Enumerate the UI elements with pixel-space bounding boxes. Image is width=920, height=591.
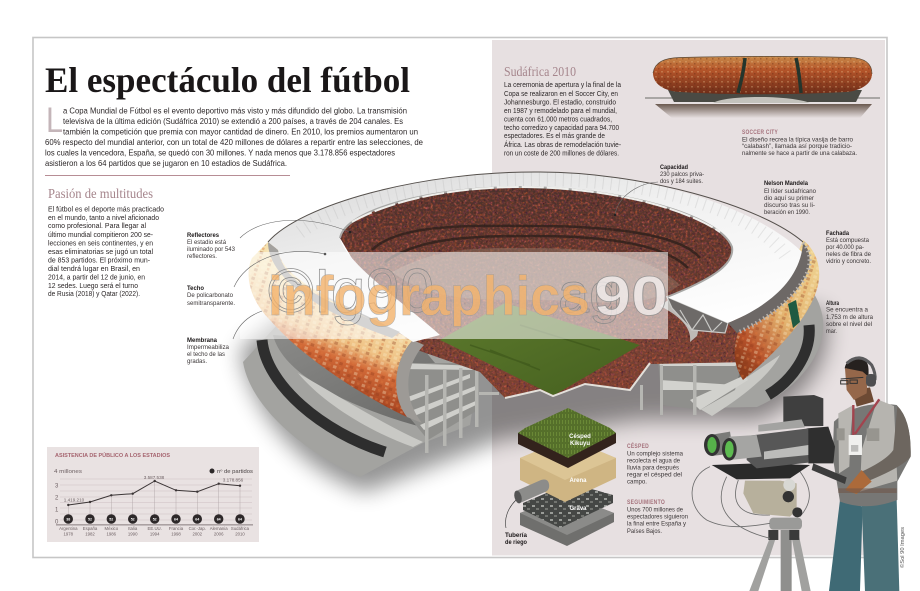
panel: attendance line chart: 64 [174, 517, 178, 521]
text block: Pasión de multitudes: dial tendrá lugar en Brasil, en [48, 266, 140, 273]
callout: Fachada: vidrio y concreto. [826, 259, 871, 265]
intro text block: a Copa Mundial de Fútbol es el evento deportivo más visto y más difundido del globo. La transmisión [63, 106, 407, 116]
panel: attendance line chart: 0 [55, 520, 59, 526]
text block: Pasión de multitudes: lecciones en seis continentes, y en [48, 240, 153, 248]
callout: Reflectores: iluminado por 543 [187, 247, 236, 253]
panel: attendance line chart: 2002 [193, 532, 203, 536]
intro text block: L [46, 101, 63, 140]
callout: Techo [187, 252, 326, 307]
text block: Sudáfrica 2010: techo corredizo y capacidad para 94.700 [504, 125, 619, 132]
callout: Techo: semitransparente. [187, 301, 235, 307]
callout: Nelson Mandela: dio aquí su primer [764, 196, 814, 202]
panel: attendance line chart: Alemania [210, 526, 228, 531]
text block: Pasión de multitudes: Pasión de multitudes [48, 187, 153, 202]
callout: Fachada: Fachada [826, 231, 850, 237]
panel: attendance line chart: 1990 [128, 532, 138, 536]
panel: attendance line chart: 52 [88, 517, 92, 521]
left cut section with columns [397, 363, 499, 453]
panel: attendance line chart: ASISTENCIA DE PÚBLICO A LOS ESTADIOS [55, 452, 170, 459]
seating bowl [340, 188, 744, 398]
text block: Césped: Un complejo sistema [627, 452, 684, 458]
text block: Sudáfrica 2010 [504, 65, 622, 158]
panel: Sudáfrica 2010 background [492, 40, 885, 556]
callout: Capacidad: Capacidad [660, 165, 688, 171]
intro text block [45, 101, 423, 176]
callout: Techo: De policarbonato [187, 293, 234, 299]
panel: attendance line chart: EE.UU. [148, 526, 162, 531]
text block: Sudáfrica 2010: África. Las obras de remodelación tuvie- [504, 140, 622, 149]
text block: Seguimiento [627, 500, 688, 535]
illustration: pitch soil layers: Tubería [505, 533, 528, 539]
text block: Pasión de multitudes: El fútbol es el deporte más practicado [48, 206, 164, 213]
illustration: pitch soil layers: de riego [505, 540, 527, 546]
text block: Césped: lluvia para después [627, 466, 679, 472]
panel: attendance line chart: 1.419.210 [64, 498, 85, 502]
camera handle [812, 463, 847, 484]
intro text block: los cuales la vencedora, España, se quedó con 30 millones. Y nada menos que 3.178.856 espectadores [45, 148, 395, 158]
panel: attendance line chart: 64 [195, 517, 199, 521]
text block: Pasión de multitudes [48, 187, 164, 298]
bowl front rim [505, 363, 650, 398]
panel: attendance line chart: 64 [238, 517, 242, 521]
layer: grass [518, 408, 616, 458]
callout: Reflectores [187, 220, 351, 260]
callout: Altura: Se encuentra a [826, 308, 869, 314]
right facade [735, 240, 819, 380]
text block: Sudáfrica 2010: cuenta con 61.000 metros cuadrados, [504, 116, 612, 124]
callout: Altura: Altura [826, 301, 839, 307]
panel: attendance line chart: 52 [131, 517, 135, 521]
text block: Sudáfrica 2010: espectadores. Es el más grande de [504, 133, 605, 140]
callout: Reflectores: reflectores. [187, 254, 217, 260]
callout: Reflectores: El estadio está [187, 240, 227, 246]
panel: attendance line chart: 1982 [85, 532, 95, 536]
layer: irrigation pipe [513, 480, 549, 504]
panel: attendance line chart: 2006 [214, 532, 224, 536]
panel: attendance line chart: 1978 [64, 532, 74, 536]
text block: Sudáfrica 2010: en 1987 y remodelado para el mundial, [504, 108, 617, 115]
text block: Césped: CÉSPED [627, 442, 649, 450]
photo credit: ©Sol 90 Images [899, 527, 906, 568]
panel: attendance line chart: Argentina [59, 526, 78, 531]
main title: El espectáculo del fútbol [45, 60, 410, 100]
text block: Pasión de multitudes: 12 sedes. Luego será el turno [48, 283, 138, 290]
text block: Pasión de multitudes: esas eliminatorias se jugó un total [48, 249, 153, 256]
panel: attendance line chart: 1994 [150, 532, 160, 536]
text block: Sudáfrica 2010: Sudáfrica 2010 [504, 65, 576, 80]
text block: Seguimiento: la final entre España y [627, 522, 686, 528]
watermark: infographics90: infographics [268, 264, 590, 327]
football pitch [440, 303, 640, 395]
illustration: pitch soil layers: Arena [569, 478, 587, 484]
text block: Seguimiento: espectadores siguieron [627, 514, 688, 520]
text block: Soccer City: nalmente se hace a partir de una calabaza. [742, 151, 857, 157]
cameraman torso [833, 399, 911, 506]
soft shadow under stadium [240, 300, 827, 492]
illustration: pitch soil layers: Kikuyu [570, 441, 590, 447]
panel: attendance line chart: nº de partidos [217, 469, 254, 475]
panel: attendance line chart: 52 [109, 517, 113, 521]
text block: Soccer City [742, 130, 857, 157]
text block: Pasión de multitudes: 2014, a partir del 12 de junio, en [48, 274, 145, 282]
panel: attendance line chart: 2 [55, 496, 59, 502]
cameraman legs [829, 498, 899, 591]
callout: Nelson Mandela: El líder sudafricano [764, 189, 817, 195]
callout: Nelson Mandela: beración en 1990. [764, 210, 810, 216]
callout: Altura [826, 301, 874, 335]
watermark: infographics90: 90 [594, 264, 668, 327]
text block: Césped: regar el césped del [627, 472, 682, 478]
text block: Seguimiento: Unos 700 millones de [627, 508, 684, 514]
panel: attendance line chart: 64 [217, 517, 221, 521]
panel: attendance line chart: 1 [55, 508, 59, 514]
panel: attendance line chart: 3.587.538 [144, 475, 165, 480]
layer: base [520, 495, 614, 546]
panel: attendance line chart: 3 [55, 484, 59, 490]
callout: Membrana: el techo de las [187, 352, 225, 358]
illustration: Soccer City exterior [645, 56, 880, 118]
panel: attendance line chart: México [104, 526, 119, 531]
text block: Pasión de multitudes: en el mundo, tanto a nivel aficionado [48, 215, 159, 222]
panel: attendance line chart: 52 [153, 517, 157, 521]
text block: Soccer City: “calabash”, llamada así porque tradicio- [742, 144, 852, 150]
illustration: pitch soil layers [505, 408, 616, 546]
callout: Capacidad [614, 165, 704, 216]
callout: Membrana: gradas. [187, 359, 207, 365]
callout: Capacidad: dos y 184 suites. [660, 179, 703, 185]
camera pan head [743, 479, 802, 517]
panel: attendance line chart: Cor.-Jap. [189, 526, 206, 531]
illustration: cameraman with TV camera [692, 358, 911, 591]
tripod [749, 518, 811, 591]
panel: attendance line chart: 2010 [235, 532, 245, 536]
callout: Membrana [187, 311, 262, 365]
camera cables [692, 467, 809, 538]
text block: Soccer City: El diseño recrea la típica vasija de barro [742, 138, 854, 144]
text block: Soccer City: SOCCER CITY [742, 130, 778, 136]
text block: Césped [627, 442, 684, 486]
callout: Reflectores: Reflectores [187, 233, 220, 239]
illustration: stadium cutaway [243, 172, 823, 477]
camera body [747, 395, 835, 468]
layer: soil [518, 413, 616, 468]
callout: Nelson Mandela: Nelson Mandela [764, 181, 809, 187]
callout: Fachada: por 40.000 pa- [826, 245, 864, 251]
panel: attendance line chart: Sudáfrica [231, 526, 250, 531]
illustration: pitch soil layers: Césped [569, 434, 591, 440]
watermark: infographics90: ©Ig90 [268, 257, 434, 326]
layer: gravel [523, 483, 613, 528]
text block: Sudáfrica 2010: La ceremonia de apertura y la final de la [504, 82, 621, 89]
panel: attendance line chart: 1986 [107, 532, 117, 536]
callout: Altura: sobre el nivel del [826, 322, 872, 328]
watermark: infographics90: ag [558, 261, 620, 324]
intro text block: televisiva de la última edición (Sudáfrica 2010) se extendió a 200 países, a través de 204 canales. Es [63, 116, 403, 126]
panel: attendance line chart: 1998 [171, 532, 181, 536]
panel: attendance line chart: España [83, 526, 98, 531]
right cut section with columns [640, 358, 748, 415]
panel: attendance line chart: 4 millones [54, 469, 82, 475]
concrete inner walls [273, 320, 780, 447]
callout: Techo: Techo [187, 286, 204, 292]
callout: Nelson Mandela: discurso tras su li- [764, 203, 815, 209]
text block: Sudáfrica 2010: Johannesburgo. El estadio, construido [504, 100, 616, 106]
text block: Pasión de multitudes: de 853 partidos. El próximo mun- [48, 258, 151, 264]
layer: sand [520, 438, 616, 502]
text block: Pasión de multitudes: como profesional. Para llegar al [48, 223, 146, 230]
callout: Membrana: Impermeabiliza [187, 345, 230, 351]
camera plate [712, 463, 810, 479]
stadium base platform [243, 270, 823, 477]
text block: Seguimiento: SEGUIMIENTO [627, 500, 665, 506]
illustration: pitch soil layers: Grava [569, 506, 587, 512]
camera lenses [704, 432, 762, 461]
outer dark ring [262, 325, 809, 452]
callout: Altura: 1.753 m de altura [826, 315, 874, 321]
cameraman head [841, 358, 876, 407]
curved inner wall right [660, 300, 698, 342]
watermark: infographics90 [240, 252, 668, 339]
roof truss right [667, 297, 728, 333]
panel: attendance line chart: 3.178.856 [223, 478, 244, 482]
callout: Fachada [826, 231, 872, 265]
text block: Césped: campo. [627, 480, 647, 486]
intro text block: asistieron a los 64 partidos que se jugaron en 10 estadios de Sudáfrica. [45, 158, 287, 168]
text block: Sudáfrica 2010: Copa se realizaron en el Soccer City, en [504, 91, 618, 98]
left facade [249, 240, 413, 417]
intro text block: también la competición que premia con mayor cantidad de dinero. En 2010, los premios aumentaron un [63, 126, 418, 136]
panel: attendance line chart: Francia [169, 526, 184, 531]
panel: attendance line chart: 38 [66, 517, 70, 521]
roof ring [268, 172, 810, 342]
text block: Seguimiento: Países Bajos. [627, 529, 662, 535]
panel: attendance line chart [47, 447, 259, 542]
callout: Fachada: neles de fibra de [826, 252, 872, 258]
text block: Pasión de multitudes: último mundial compitieron 200 se- [48, 232, 154, 239]
callout: Membrana: Membrana [187, 338, 218, 344]
text block: Sudáfrica 2010: ron un coste de 200 millones de dólares. [504, 150, 619, 158]
intro text block: 60% respecto del mundial anterior, con un total de 420 millones de dólares a repartir entre las selecciones, de [45, 137, 423, 147]
panel: attendance line chart: Italia [128, 526, 138, 531]
callout: Fachada: Está compuesta [826, 238, 870, 244]
callout: Altura: mar. [826, 329, 837, 335]
lanyard and badge [849, 399, 879, 455]
callout: Capacidad: 230 palcos priva- [660, 172, 704, 178]
text block: Pasión de multitudes: de Rusia (2018) y Qatar (2022). [48, 291, 140, 298]
left concrete interior below facade edge [396, 340, 424, 423]
callout: Nelson Mandela [764, 181, 817, 216]
text block: Césped: recolecta el agua de [627, 458, 681, 464]
